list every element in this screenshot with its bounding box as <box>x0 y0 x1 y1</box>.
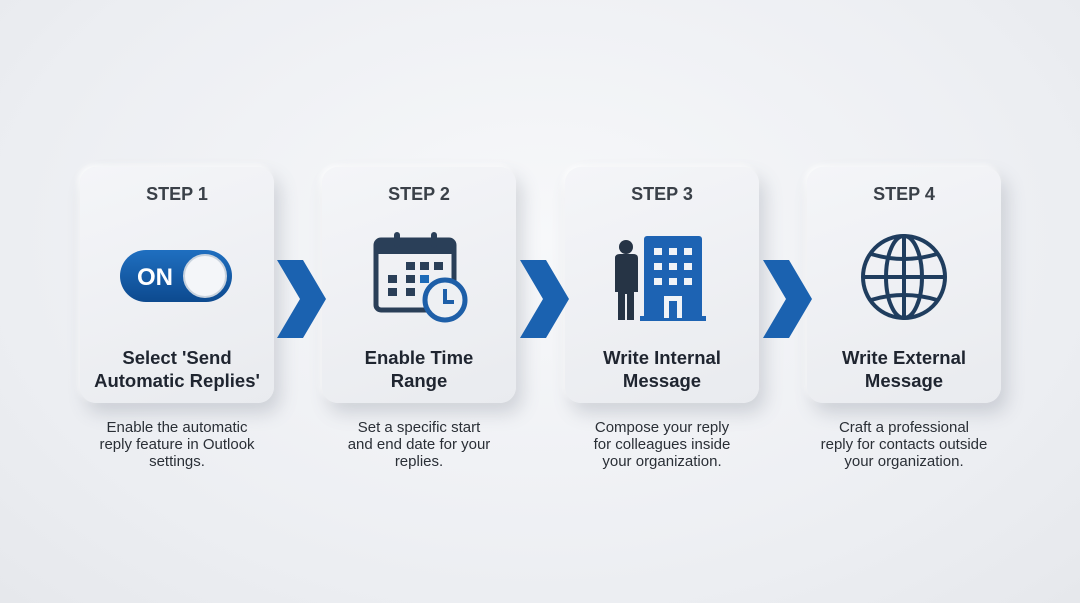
icon: toggle ON <box>120 250 232 302</box>
arrow 3 <box>763 260 812 338</box>
card: step 2: STEP 2 <box>388 184 450 204</box>
card: step 2: Enable Time <box>365 347 473 368</box>
description 1: Enable the automatic <box>107 419 247 436</box>
icon: person and building <box>615 236 706 321</box>
description 2: replies. <box>395 453 443 470</box>
card: step 3 <box>565 167 759 403</box>
title <box>94 347 260 391</box>
card: step 4 <box>807 167 1001 403</box>
description 3: for colleagues inside <box>594 436 730 453</box>
description 4: your organization. <box>844 453 964 470</box>
description 1 <box>99 419 255 470</box>
icon: toggle ON: ON <box>137 264 173 291</box>
description 4 <box>821 419 987 470</box>
icon: globe <box>861 234 947 320</box>
title: Select 'Send <box>122 347 232 368</box>
description 2 <box>348 419 490 470</box>
description 2: and end date for your <box>348 436 490 453</box>
description 1: reply feature in Outlook <box>99 436 255 453</box>
card: step 2 <box>322 167 516 403</box>
description 3 <box>594 419 730 470</box>
description 2: Set a specific start <box>358 419 480 436</box>
description 3: Compose your reply <box>595 419 729 436</box>
card: step 3: Message <box>623 370 701 391</box>
step 1 label: STEP 1 <box>146 184 208 204</box>
card: step 3: Write Internal <box>603 347 721 368</box>
icon: calendar clock <box>374 232 468 322</box>
card: step 1 <box>80 167 274 403</box>
description 4: reply for contacts outside <box>821 436 987 453</box>
description 3: your organization. <box>602 453 722 470</box>
card: step 4: Message <box>865 370 943 391</box>
arrow 1 <box>277 260 326 338</box>
card: step 4: Write External <box>842 347 966 368</box>
arrow 2 <box>520 260 569 338</box>
title: Automatic Replies' <box>94 370 260 391</box>
card: step 3: STEP 3 <box>631 184 693 204</box>
description 1: settings. <box>149 453 205 470</box>
card: step 4: STEP 4 <box>873 184 935 204</box>
description 4: Craft a professional <box>839 419 969 436</box>
card: step 2: Range <box>391 370 447 391</box>
